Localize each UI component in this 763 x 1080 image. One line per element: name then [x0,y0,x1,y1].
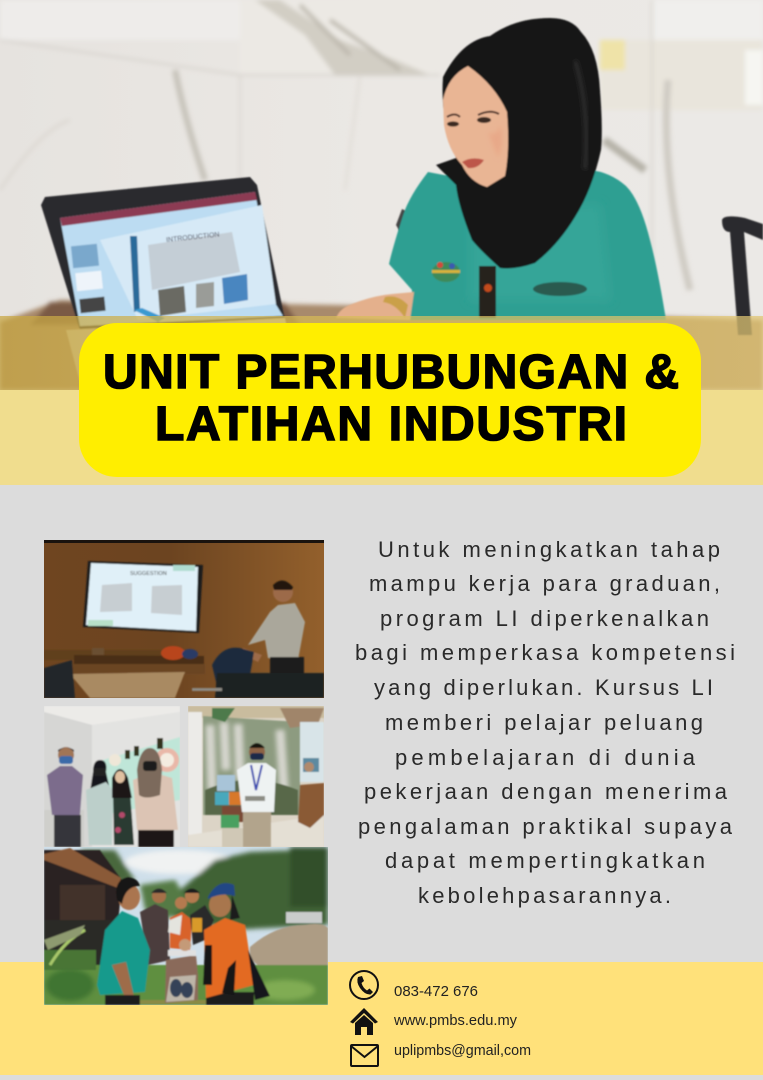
contact details: 083-472 676 [394,983,478,1000]
laptop: INTRODUCTION [166,231,220,244]
laptop [41,177,300,390]
shirt [389,170,666,320]
body paragraph: pembelajaran di dunia [395,745,696,770]
logos [432,262,460,282]
woman black hijab [90,760,110,792]
grass [44,965,328,1005]
hero photo: woman presenting at a laptop [0,0,763,390]
body paragraph: dapat mempertingkatkan [385,848,705,873]
face [443,66,508,187]
man [273,582,293,602]
body paragraph: mampu kerja para graduan, [369,571,720,596]
woman orange shirt [206,992,254,1005]
booth table and boards [215,792,229,805]
icon: envelope [351,1045,378,1066]
woman teal shirt [97,911,150,995]
translucent yellow band over the photo [0,316,763,390]
woman orange with sling [170,912,192,950]
hijab [436,18,602,268]
icon: phone [350,971,378,999]
chair [396,209,763,335]
title pill [79,323,701,477]
man grey shirt [140,904,170,965]
photo: four staff members in a room [44,706,180,847]
contact details: www.pmbs.edu.my [393,1012,517,1029]
title text [103,346,679,451]
person on stretcher [140,1000,250,1004]
icon: house [350,1008,378,1035]
body paragraph: yang diperlukan. Kursus LI [374,675,713,700]
photo: group carrying a person on a stretcher [44,847,328,1005]
man [243,810,271,847]
body paragraph: pengalaman praktikal supaya [358,814,733,839]
title panel [79,323,701,477]
woman taupe hijab [138,828,174,847]
photo: seminar presenter [44,540,324,698]
woman [336,18,666,320]
body paragraph: Untuk meningkatkan tahap [378,537,720,562]
yellow footer band [0,962,763,1075]
man [54,815,81,847]
counter [298,783,324,828]
chair [212,648,254,690]
photo: man at an exhibition booth [188,706,324,847]
shed [286,912,322,923]
arm and hand [336,292,414,320]
title text: LATIHAN INDUSTRI [155,398,627,451]
photo: seminar presenter: SUGGESTION [130,571,167,577]
lanyard [479,266,496,318]
contact details: uplipmbs@gmail,com [394,1042,531,1059]
woman floral [113,790,134,845]
house [44,850,122,925]
man black orange [190,905,214,945]
body paragraph: kebolehpasarannya. [418,883,671,908]
sand pile [250,924,328,968]
body paragraph: memberi pelajar peluang [385,710,703,735]
title text: UNIT PERHUBUNGAN & [103,346,679,399]
contact details [393,983,531,1059]
table [0,300,763,390]
body paragraph: pekerjaan dengan menerima [364,779,728,804]
pale yellow band under the photo [0,390,763,485]
body paragraph: program LI diperkenalkan [380,606,709,631]
body paragraph: bagi memperkasa kompetensi [355,640,735,665]
body paragraph [355,537,735,908]
